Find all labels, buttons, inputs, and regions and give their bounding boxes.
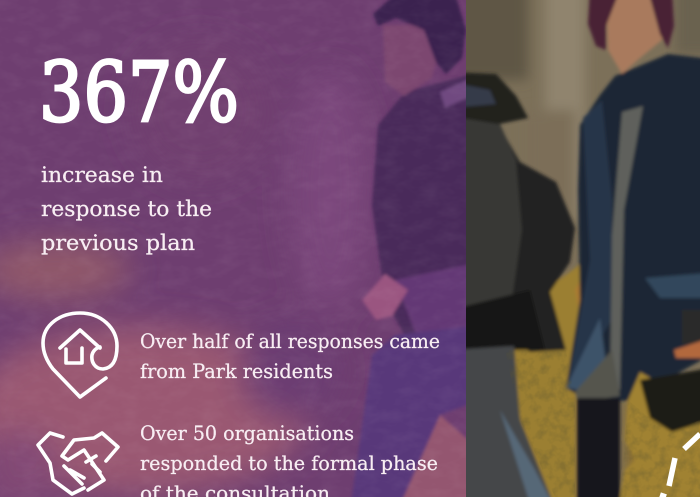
text: increase in response to the previous plan: previous plan (41, 231, 195, 256)
icon: handshake (38, 433, 118, 494)
foreground ferns (618, 365, 700, 497)
right hiker's jacket (566, 54, 700, 402)
hat and face (606, 0, 664, 74)
text: increase in response to the previous plan: response to the (41, 197, 212, 222)
photo: hikers on the right, unfiltered (440, 0, 700, 497)
hiker's helmet (373, 0, 466, 74)
text: increase in response to the previous plan: increase in (41, 163, 163, 188)
title: 367%: 367% (39, 46, 239, 141)
dashed white arc (660, 434, 700, 497)
text: park residents: Over half of all responses came (140, 330, 440, 353)
left hiker's jacket and hood (466, 116, 522, 308)
slope wedge (402, 414, 466, 497)
text: organisations: Over 50 organisations (140, 422, 354, 445)
text: park residents: from Park residents (140, 360, 333, 383)
text: park residents (140, 330, 440, 383)
icon: house in map pin (43, 313, 117, 397)
hiker's hand (362, 274, 408, 320)
bracken (513, 263, 582, 497)
hand and sleeve (682, 310, 700, 344)
left hiker's jeans (466, 344, 552, 497)
text: organisations: responded to the formal phase (140, 452, 438, 475)
text: increase in response to the previous plan (41, 163, 212, 256)
hiker's neck and face (383, 25, 436, 96)
hiker's arm (396, 264, 466, 334)
hiker's jacket (370, 74, 466, 335)
left hiker's backpack (508, 142, 577, 354)
right hiker's trousers (577, 398, 620, 497)
hiker's jeans (352, 328, 466, 497)
photo: hiker and hillside behind purple panel (0, 0, 480, 497)
text: organisations (140, 422, 438, 497)
